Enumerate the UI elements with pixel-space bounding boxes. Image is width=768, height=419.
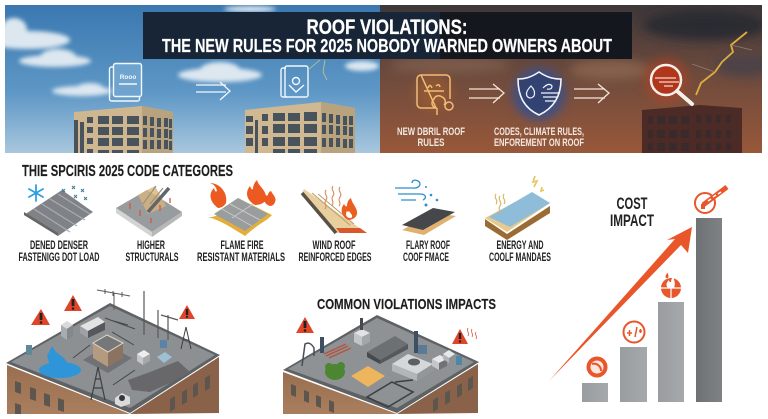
heading: common violations: COMMON VIOLATIONS IMPACTS — [317, 296, 496, 313]
illustration: rooftop left — [6, 289, 220, 414]
icon: warning right 2 — [452, 329, 468, 344]
panel: hero banner storm side — [380, 5, 768, 153]
penthouse box — [83, 335, 132, 373]
banner captions: NEW DBRIL ROOF — [397, 126, 465, 138]
banner captions: CODES, CLIMATE RULES, — [494, 126, 584, 138]
arrow: sky 1 — [196, 82, 230, 100]
heading: cost impact: IMPACT — [610, 212, 654, 230]
frame on roof — [367, 380, 413, 407]
cardboard boxes — [351, 366, 385, 387]
category captions: WIND ROOF — [312, 240, 356, 252]
icon: warning right 1 — [296, 317, 314, 333]
membrane damage — [128, 361, 190, 392]
vent stacks — [320, 331, 427, 354]
icon: energy and cool mandates — [485, 176, 550, 240]
icon: orange rule document — [415, 74, 453, 115]
arrow: storm 1 — [469, 84, 504, 103]
icon: cost badge 2 — [624, 322, 644, 342]
icon: wind reinforced edges — [302, 186, 367, 233]
illustration: rooftop right — [283, 315, 479, 414]
category captions — [18, 240, 551, 264]
category captions: REINFORCED EDGES — [298, 252, 372, 264]
icon: warning left 1 — [31, 309, 50, 325]
icon: rule book: Rooo — [120, 74, 136, 81]
panel: hero banner sky side — [0, 5, 380, 153]
icon: cost badge 4 — [695, 187, 727, 213]
shrub — [325, 362, 345, 380]
icon: cost badge 1 — [586, 356, 608, 378]
heading: code categories: THIE SPCIRIS 2025 CODE CATEGORES — [22, 163, 233, 180]
icon: lightning — [692, 32, 752, 95]
red pipe rack — [324, 344, 351, 358]
icon: magnifier — [644, 58, 692, 104]
title bar — [143, 12, 632, 59]
title bar: ROOF VIOLATIONS: — [306, 15, 468, 39]
pipes and clutter — [73, 318, 135, 385]
icon: flary roof — [395, 180, 456, 235]
icon: climate shield — [513, 68, 565, 120]
heading: cost impact — [610, 195, 654, 230]
icon: heat waves — [467, 328, 477, 339]
heading: cost impact: COST — [616, 195, 648, 213]
icon: denser fastening — [24, 185, 93, 236]
category captions: FLAME FIRE — [220, 240, 264, 252]
banner captions: ENFOREMENT ON ROOF — [494, 137, 584, 149]
category captions: RESISTANT MATERIALS — [197, 252, 285, 264]
icon: higher structural — [116, 186, 182, 237]
hvac units — [61, 317, 172, 407]
title bar: THE NEW RULES FOR 2025 NOBODY WARNED OWNERS ABOUT — [162, 35, 613, 56]
category captions: ENERGY AND — [496, 240, 544, 252]
tank — [26, 345, 32, 355]
building left — [74, 106, 173, 153]
hvac tower — [354, 318, 370, 346]
bar chart: cost impact — [582, 218, 722, 402]
ac units — [392, 350, 462, 381]
icon: cost badge 3 — [661, 273, 681, 298]
category captions: HIGHER — [137, 240, 165, 252]
icon: rule book — [110, 64, 142, 101]
building middle — [245, 102, 355, 153]
icon: warning left 2 — [64, 295, 82, 311]
icon: rule document with lightning — [281, 60, 327, 97]
clouds — [0, 6, 379, 96]
category captions: FLARY ROOF — [406, 240, 450, 252]
antennas and towers — [91, 289, 191, 400]
icon: warning left 3 — [179, 305, 195, 319]
category captions: COOLF MANDAES — [489, 252, 551, 264]
banner captions — [397, 126, 584, 149]
category captions: STRUCTURALS — [126, 252, 179, 264]
arrow: rising cost — [549, 227, 692, 381]
icon: flame resistant — [208, 180, 276, 236]
storm clouds — [390, 10, 768, 80]
dark building — [642, 105, 742, 153]
category captions: FASTENIGG DOT LOAD — [18, 252, 100, 264]
dark equipment — [367, 336, 408, 364]
banner captions: RULES — [418, 137, 444, 149]
arrow: storm 2 — [574, 84, 609, 103]
category captions: DENED DENSER — [30, 240, 88, 252]
water pooling — [39, 346, 81, 378]
category captions: COOF FMACE — [403, 252, 449, 264]
